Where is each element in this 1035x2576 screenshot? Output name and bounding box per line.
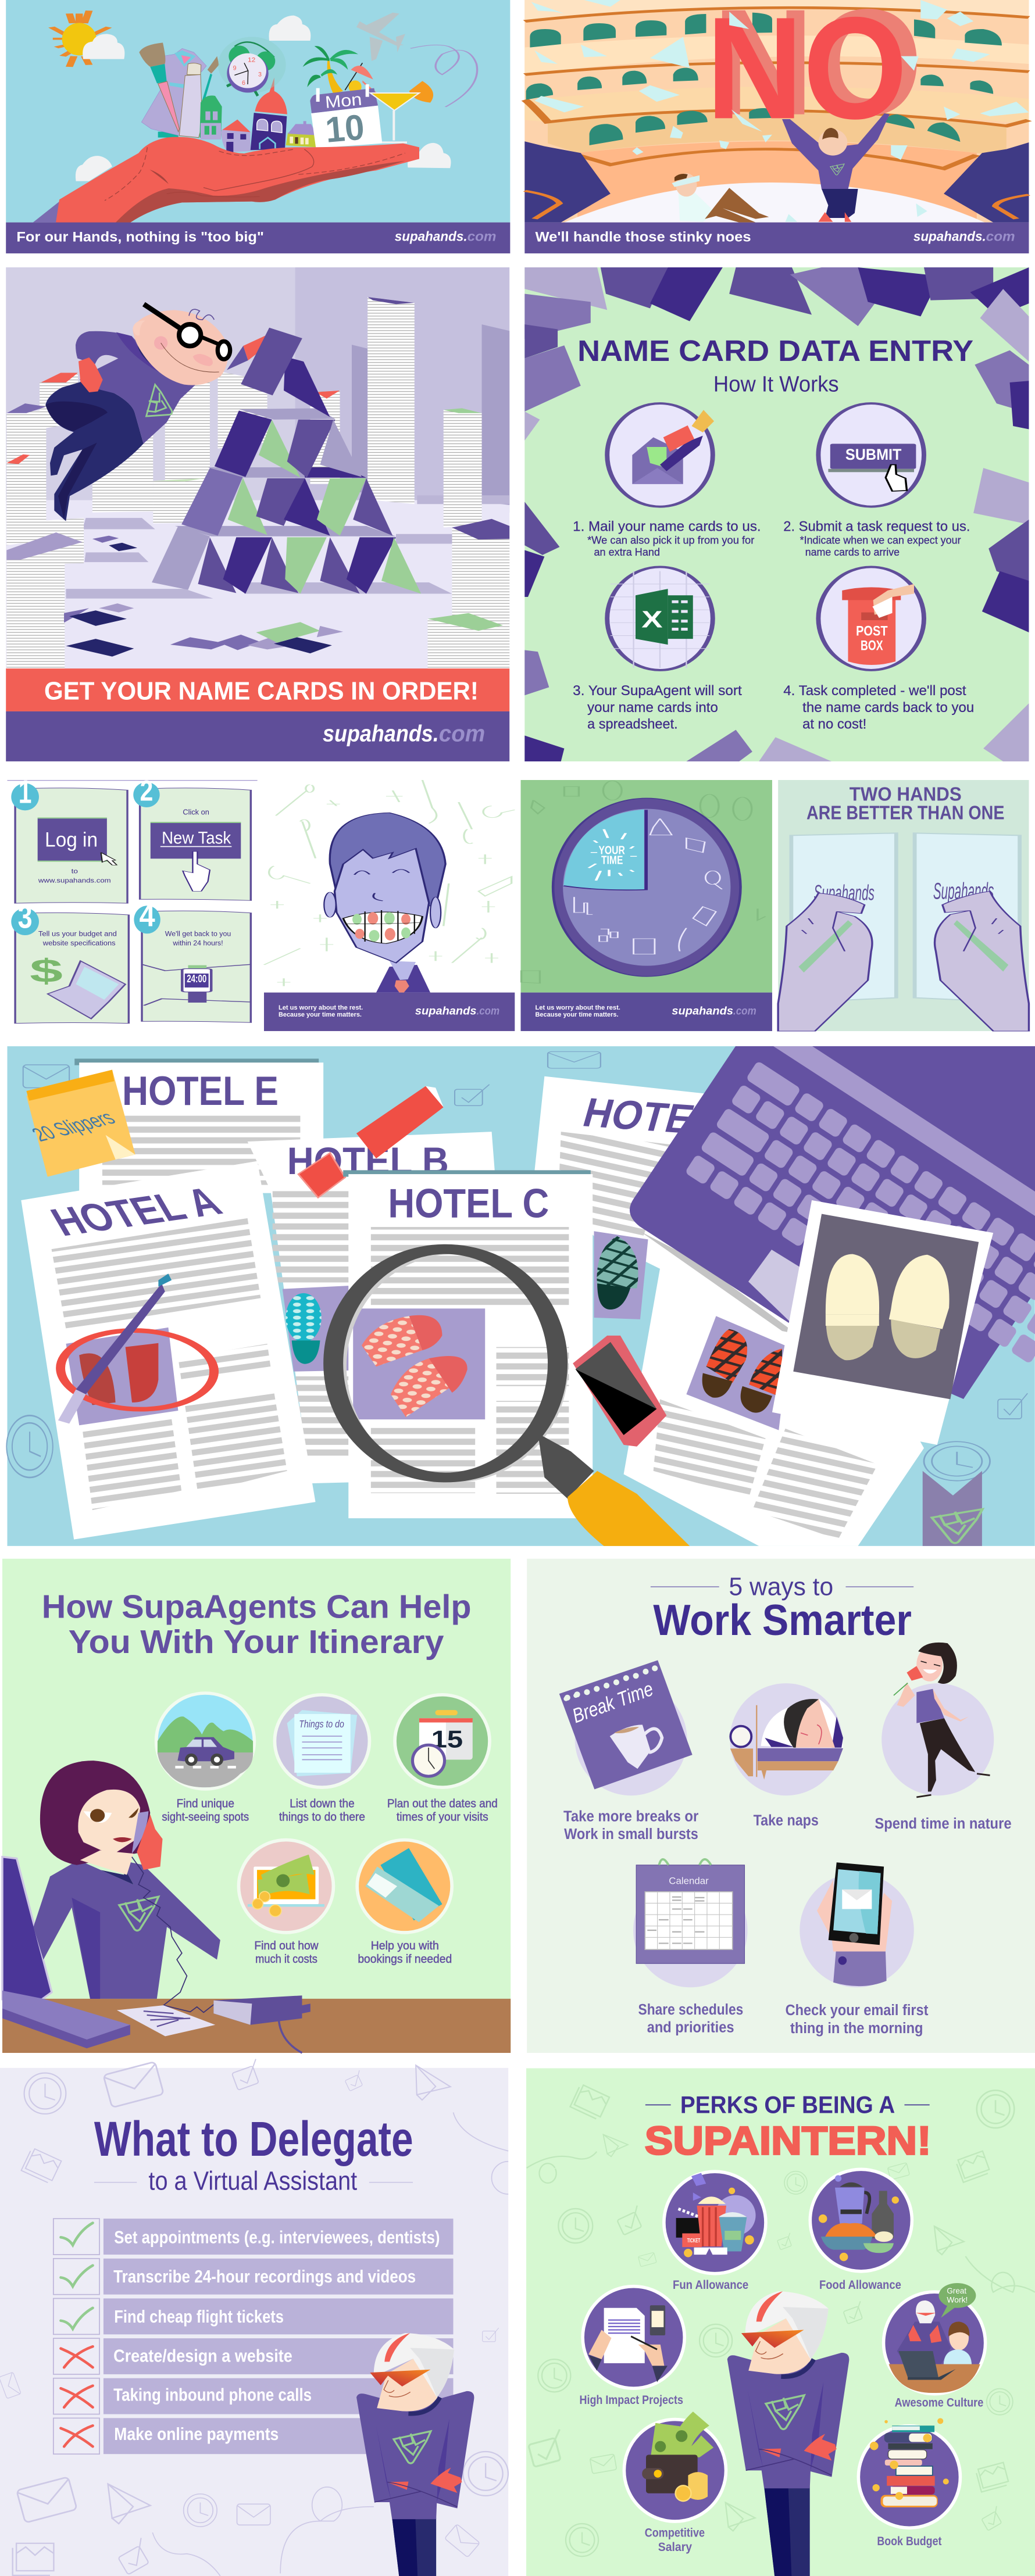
- ticket label: TICKET: [687, 2238, 701, 2244]
- icon: post box circle: BOX: [861, 638, 883, 653]
- label: share schedules: [638, 2002, 743, 2036]
- title: What to Delegate: [94, 2112, 413, 2167]
- hand left: [778, 893, 872, 1031]
- superhero: [356, 2333, 474, 2576]
- icon: keyboard: [630, 1046, 1035, 1402]
- panel: name card data entry: 3. Your SupaAgent will sort: [573, 682, 742, 699]
- footer bar: com: [439, 721, 485, 746]
- panel: braces face: [264, 780, 515, 1031]
- calendar Mon 10: [310, 84, 382, 151]
- heading: 5 ways to: 5 ways to: [729, 1573, 833, 1601]
- step 4: [783, 682, 974, 732]
- panel: for our hands nothing is too big: [6, 0, 510, 253]
- step box 1: to: [72, 868, 78, 875]
- circle: bookings: [357, 1840, 452, 1933]
- superhero lifting NO: [782, 113, 890, 222]
- panel: name card data entry: [524, 267, 1029, 761]
- row 6 text: Make online payments: [114, 2424, 279, 2444]
- circle: fun allowance: [664, 2171, 766, 2274]
- row 3: [53, 2298, 453, 2334]
- phone cord: [132, 1857, 230, 2012]
- panel: perks of being a supaintern: [526, 2068, 1035, 2576]
- top rule: [7, 780, 258, 781]
- step box 1: [11, 774, 127, 903]
- icon: cocktail: [370, 93, 419, 142]
- icon: polaroid: [772, 1200, 993, 1445]
- panel: four website steps: website specifications: [42, 939, 116, 947]
- panel: we'll handle those stinky noes: [524, 0, 1029, 253]
- trackpad: [748, 1250, 814, 1331]
- panel: hotel comparison desk: [6, 1046, 1035, 1546]
- stacked paper towers: [6, 297, 509, 668]
- red banner: [6, 668, 509, 711]
- label: high impact projects: High Impact Projects: [580, 2393, 683, 2407]
- pale green background: [778, 780, 1029, 1031]
- panel: name card data entry: How It Works: [713, 371, 839, 396]
- label: things to do: [279, 1798, 365, 1823]
- doodles: [0, 2059, 508, 2576]
- neck and suit: [376, 961, 430, 993]
- icon: palm tree: [303, 46, 377, 94]
- circle: plan dates: [395, 1695, 490, 1787]
- scattered cards: [64, 536, 343, 657]
- stairs: [524, 141, 1029, 223]
- line 2: times of your visits: [397, 1811, 488, 1823]
- sleeve: [33, 202, 59, 223]
- circle: high impact projects: [583, 2287, 684, 2388]
- mint background: [2, 1559, 511, 2053]
- big red NO: [706, 0, 923, 149]
- mint background: [526, 2068, 1035, 2576]
- label: nature: Spend time in nature: [875, 1816, 1012, 1832]
- line 2: things to do there: [279, 1811, 365, 1823]
- fallen man: [672, 173, 769, 223]
- illustration: naps: [730, 1683, 843, 1795]
- title line 1: How SupaAgents Can Help: [42, 1589, 471, 1625]
- footer bar: For our Hands, nothing is "too big": [16, 229, 264, 245]
- label: breaks: [563, 1809, 698, 1842]
- circle: competitive salary: [624, 2412, 726, 2521]
- step box 3: [11, 899, 129, 1024]
- footer bar: [521, 993, 772, 1031]
- circle: food allowance: [810, 2169, 912, 2271]
- subtitle: to a Virtual Assistant: [148, 2166, 357, 2196]
- list title: Things to do: [299, 1718, 344, 1730]
- doodles: [522, 781, 766, 983]
- white stage: [564, 183, 984, 223]
- step 3: your name cards into: [587, 699, 718, 715]
- desk: [2, 1999, 511, 2053]
- line 2: Work in small bursts: [564, 1826, 698, 1842]
- icon: laptop: [48, 961, 126, 1019]
- panel: name card data entry: *We can also pick it up from you for: [587, 534, 754, 546]
- panel: your time clock: [521, 780, 772, 1031]
- icon: mascara: [179, 56, 219, 138]
- sheet: hotel E: [74, 1058, 323, 1193]
- step box 2: 2: [140, 774, 153, 807]
- icon: pointer hand: [886, 465, 906, 491]
- footer bar: Because your time matters.: [279, 1011, 362, 1018]
- panel: 5 ways to work smarter: [527, 1559, 1035, 2053]
- row 5: [53, 2378, 453, 2414]
- sticky note text: 20 Slippers: [25, 1107, 122, 1146]
- paper sheets: [791, 833, 1020, 1003]
- label: competitive: Competitive: [645, 2525, 705, 2540]
- label: bookings: [358, 1940, 452, 1966]
- confetti paper: [531, 0, 1029, 222]
- clock: YOUR: [598, 843, 625, 857]
- line 1: Find unique: [177, 1798, 234, 1810]
- panel: four website steps: within 24 hours!: [173, 939, 223, 947]
- hotel A title: HOTEL A: [43, 1179, 229, 1244]
- text: supahands: [415, 1004, 476, 1017]
- step 3: a spreadsheet.: [587, 716, 678, 732]
- footer bar: Let us worry about the rest.: [279, 1004, 363, 1011]
- line 1: Help you with: [371, 1940, 439, 1952]
- clock: TIME: [601, 853, 623, 867]
- panel: four website steps: Log in: [45, 828, 98, 851]
- icon: clouds: [76, 16, 451, 181]
- step 4: at no cost!: [802, 716, 866, 732]
- bubble line 1: Great: [947, 2287, 966, 2295]
- text: New Task: [162, 828, 231, 847]
- step box 2: [133, 774, 251, 900]
- note text: Break Time: [570, 1678, 656, 1727]
- panel background sky: [6, 0, 510, 223]
- icon: submit circle: SUBMIT: [845, 446, 901, 463]
- illustration: break time: [559, 1660, 693, 1795]
- icon: phone: [573, 1336, 666, 1447]
- label: sight-seeing: [162, 1798, 249, 1823]
- illustration: nature: [881, 1643, 994, 1797]
- step box 3: 3: [18, 899, 33, 935]
- heading: supaintern: SUPAINTERN!: [645, 2118, 931, 2163]
- icon: makeup brush: [139, 42, 179, 132]
- step box 4: [134, 898, 251, 1022]
- text: .com: [733, 1004, 756, 1017]
- line 2: and priorities: [647, 2020, 734, 2036]
- calendar title: Calendar: [669, 1875, 709, 1886]
- lavender background: [0, 2068, 508, 2576]
- footer bar: Let us worry about the rest.: [535, 1004, 620, 1011]
- icon: mail circle: [607, 403, 714, 507]
- clock numeral 12: 12: [248, 57, 255, 64]
- house of cards: [152, 328, 421, 593]
- label: fun allowance: Fun Allowance: [673, 2278, 748, 2292]
- text: supahands: [672, 1004, 733, 1017]
- icon: purple tower: [251, 77, 287, 150]
- panel: name card data entry: 1. Mail your name cards to us.: [573, 518, 761, 534]
- calendar date: 15: [431, 1726, 463, 1754]
- label: book budget: Book Budget: [877, 2534, 941, 2548]
- doodles: [527, 2084, 1035, 2556]
- icon: dress: [141, 48, 206, 138]
- bubble line 2: Work!: [947, 2296, 968, 2305]
- step box 4: 24:00: [187, 972, 206, 985]
- row 4: [53, 2338, 453, 2374]
- clock icons: [574, 818, 722, 954]
- calendar day text: Mon: [324, 90, 363, 112]
- monitor: [2, 1857, 52, 1999]
- footer bar: [6, 223, 510, 253]
- icon: red giant hand: [56, 137, 419, 223]
- sheet: hotel D: [534, 1076, 924, 1546]
- step box 2: Click on: [183, 808, 209, 816]
- icon: watch: [182, 965, 211, 1003]
- icon: green house: [199, 95, 222, 139]
- label: salary: Salary: [658, 2540, 692, 2554]
- excel X: X: [641, 606, 663, 633]
- mint background: [524, 267, 1029, 761]
- row 4 text: Create/design a website: [113, 2346, 292, 2366]
- woman on phone: [33, 1761, 220, 1999]
- row 3 text: Find cheap flight tickets: [114, 2306, 284, 2327]
- white background: [264, 780, 515, 993]
- papers: [117, 2005, 215, 2036]
- circle: awesome culture: [884, 2283, 986, 2394]
- line 1: Check your email first: [786, 2002, 929, 2019]
- clock numeral 9: 9: [233, 65, 237, 72]
- label: awesome culture: Awesome Culture: [895, 2396, 983, 2410]
- step 1: an extra Hand: [594, 546, 660, 558]
- sheet: hotel A: [21, 1161, 316, 1540]
- circle: things to do: [274, 1695, 369, 1787]
- step box 4: 4: [139, 898, 155, 933]
- step 2: [783, 518, 970, 558]
- icon: small house: [221, 120, 251, 152]
- line 1: Take more breaks or: [563, 1809, 698, 1825]
- pale green background: [527, 1559, 1035, 2053]
- sheet: hotel B: [248, 1132, 495, 1483]
- icon: dollars: $: [30, 953, 63, 989]
- label: check email: [786, 2002, 929, 2037]
- icon: excel circle: [607, 567, 713, 670]
- superhero: [727, 2291, 849, 2576]
- step 1: [573, 518, 761, 558]
- icon: yellow house: [286, 121, 317, 147]
- icon: alarm clock: [218, 37, 286, 96]
- panel: what to delegate: [0, 2059, 508, 2576]
- hand right: [935, 891, 1029, 1031]
- row 1: [53, 2219, 453, 2255]
- panel: four website steps: Tell us your budget and: [38, 930, 117, 938]
- icon: sun: [52, 10, 109, 67]
- line 2: thing in the morning: [790, 2020, 923, 2037]
- row 6: [53, 2418, 453, 2454]
- text: supahands.: [395, 229, 467, 244]
- icon: sticky note 20 slippers: [25, 1070, 135, 1177]
- illustration: phone email: [800, 1862, 914, 1987]
- panel background: [7, 780, 258, 1031]
- icon: orange slice: [409, 81, 433, 103]
- footer bar: [6, 711, 509, 761]
- row 2 text: Transcribe 24-hour recordings and videos: [113, 2266, 416, 2287]
- subtitle rules: [94, 2181, 413, 2183]
- phone base: [213, 1995, 310, 2053]
- circle: costs: [238, 1840, 333, 1933]
- illustration: objects on the hand: [56, 37, 419, 223]
- sheet: hotel E: HOTEL E: [122, 1068, 279, 1114]
- line 2: bookings if needed: [358, 1953, 452, 1966]
- face with hair: [324, 813, 445, 963]
- panel: get your name cards in order: [6, 267, 509, 761]
- line 2: sight-seeing spots: [162, 1811, 249, 1823]
- text: com: [467, 229, 497, 244]
- doodle tools: [264, 780, 515, 986]
- icon: marker: [298, 1086, 444, 1197]
- icon: pen: [58, 1273, 172, 1423]
- bookmark: [923, 1471, 983, 1546]
- sheet: hotel B: HOTEL B: [287, 1140, 449, 1183]
- arena background: [524, 0, 1029, 223]
- key grid: [681, 1057, 1035, 1402]
- row 5 text: Taking inbound phone calls: [113, 2385, 312, 2405]
- heading: perks of being a: PERKS OF BEING A: [680, 2091, 895, 2119]
- step box 1: 1: [19, 774, 31, 810]
- step 2: name cards to arrive: [805, 546, 900, 558]
- circle: sight-seeing: [156, 1693, 254, 1789]
- step 3: [573, 682, 742, 732]
- footer bar: Because your time matters.: [535, 1011, 618, 1018]
- line 1: Find out how: [254, 1940, 319, 1952]
- calendar date text: 10: [324, 107, 366, 151]
- heading rules: [645, 2104, 930, 2106]
- panel: four website steps: www.supahands.com: [38, 876, 111, 884]
- text: We'll get back to you: [165, 930, 231, 938]
- footer bar: [264, 993, 515, 1031]
- clock: [553, 798, 740, 976]
- heading rules: [651, 1586, 913, 1587]
- footer bar: [524, 223, 1029, 253]
- clock numeral 3: 3: [258, 71, 262, 78]
- line 1: Share schedules: [638, 2002, 743, 2018]
- icon: post box circle: [818, 567, 924, 670]
- row 2: [53, 2259, 453, 2295]
- icon: post box circle: POST: [856, 623, 888, 639]
- city backdrop: [6, 267, 509, 670]
- row 1 text: Set appointments (e.g. interviewees, dentists): [114, 2227, 440, 2247]
- icon: airplane: [356, 13, 405, 61]
- circle: book budget: [858, 2418, 960, 2528]
- blue desk: [7, 1046, 1035, 1546]
- panel: how supaagents can help: [2, 1559, 511, 2053]
- line 1: List down the: [290, 1798, 355, 1810]
- sheet: hotel C: [343, 1170, 593, 1518]
- superhero with glasses: [45, 304, 273, 521]
- label: costs: [254, 1940, 319, 1966]
- label: plan dates: [387, 1798, 498, 1823]
- title line 2: You With Your Itinerary: [69, 1625, 444, 1661]
- icon: submit circle: [818, 403, 924, 507]
- text: .com: [476, 1004, 499, 1017]
- line 2: much it costs: [255, 1953, 317, 1966]
- keyboard: [2, 1991, 130, 2048]
- panel: two hands are better than one: [778, 780, 1029, 1031]
- line 1: Plan out the dates and: [387, 1798, 498, 1810]
- doodles: [6, 1051, 1027, 1481]
- footer bar: supahands.: [323, 721, 439, 746]
- hotel D title: HOTE: [579, 1089, 699, 1142]
- illustration: calendar: [633, 1859, 748, 1987]
- sheet: hotel C: HOTEL C: [388, 1180, 549, 1226]
- label: food allowance: Food Allowance: [819, 2278, 901, 2292]
- braces mouth: [343, 910, 422, 943]
- green background: [521, 780, 772, 993]
- label: naps: Take naps: [754, 1812, 819, 1829]
- icon: magnifying glass: [333, 1249, 690, 1546]
- panel: four website steps: [7, 774, 258, 1031]
- red banner: GET YOUR NAME CARDS IN ORDER!: [44, 677, 479, 705]
- clock numeral 6: 6: [242, 80, 245, 87]
- squiggle: [411, 45, 477, 107]
- heading: work smarter: Work Smarter: [653, 1595, 912, 1644]
- scattered card border: [524, 267, 1029, 761]
- arches: [526, 13, 1002, 145]
